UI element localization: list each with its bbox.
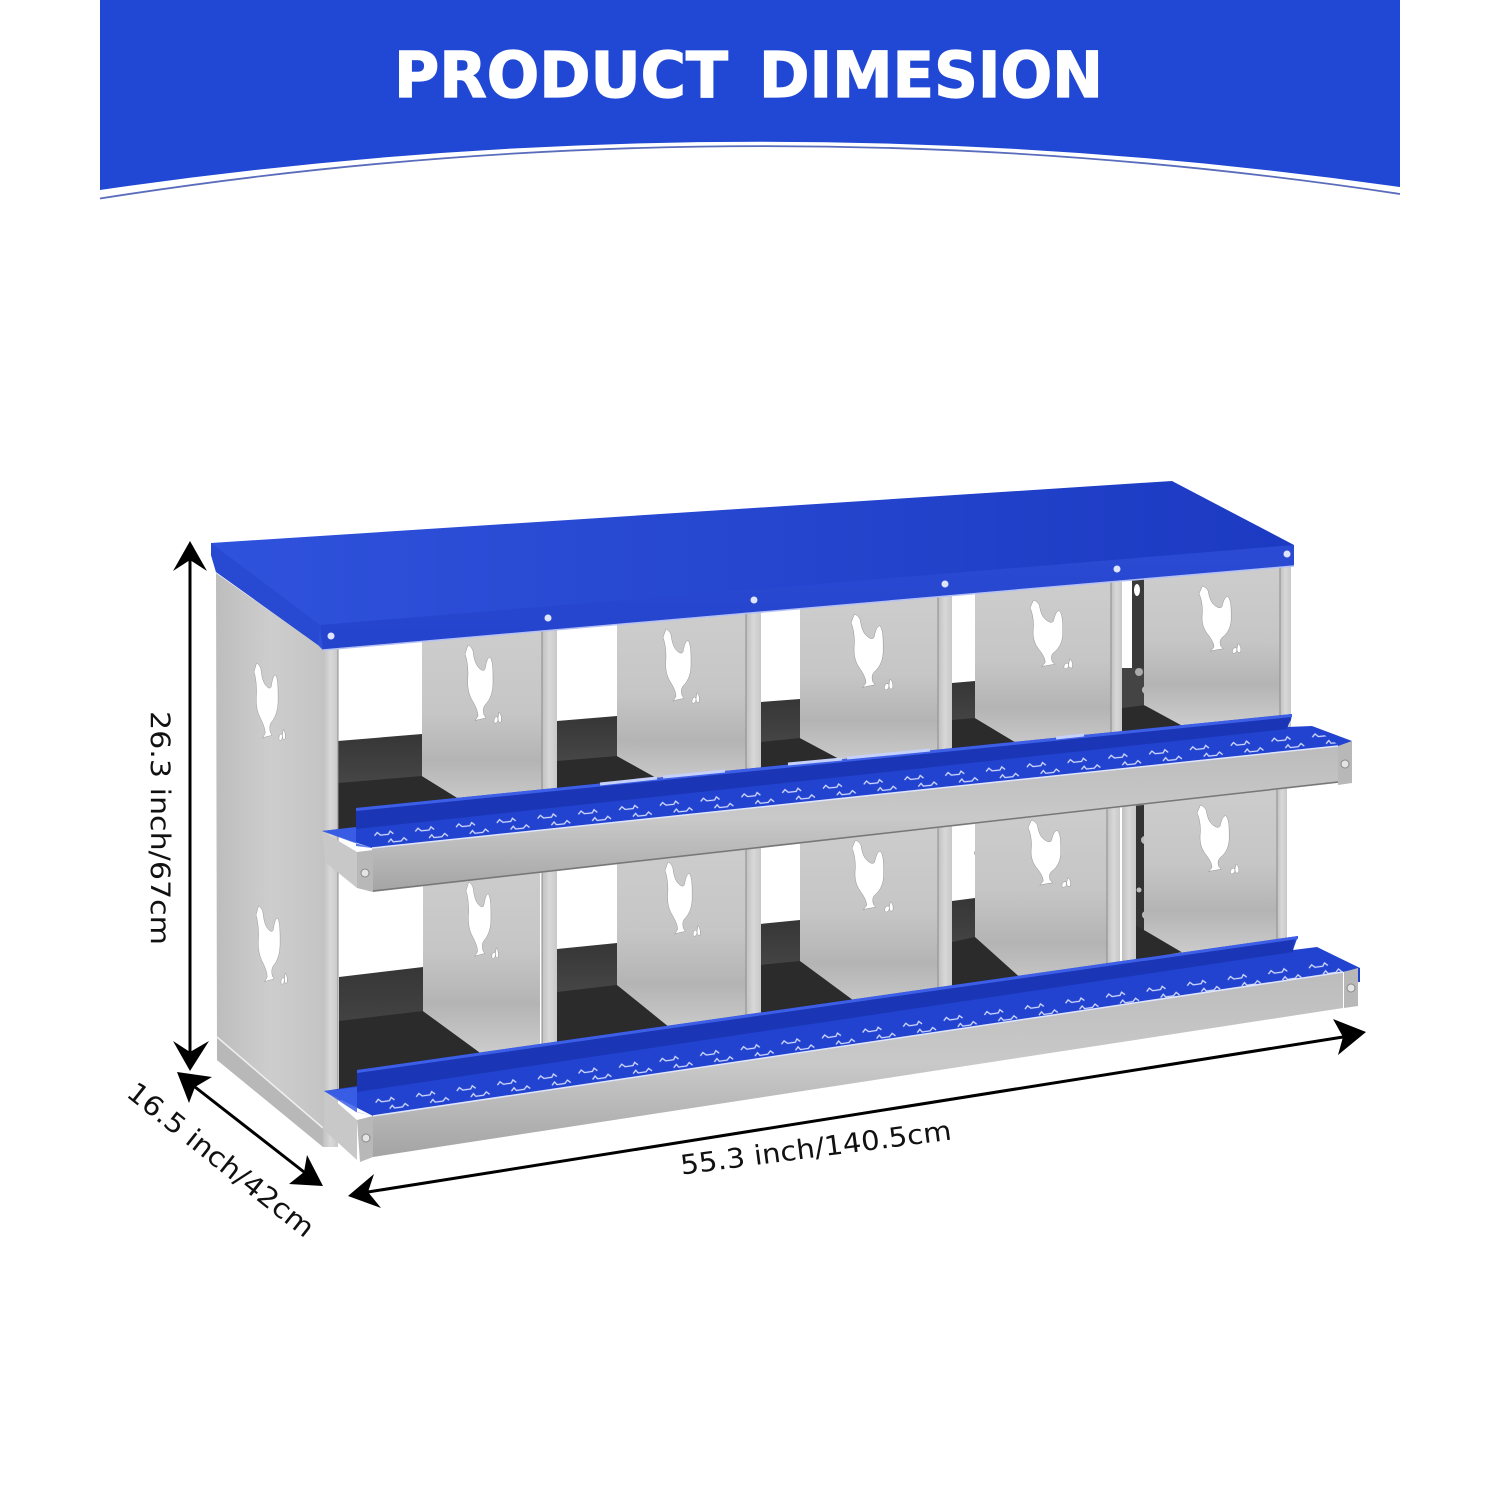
arrow: depth (177, 1072, 323, 1186)
title: PRODUCT (394, 39, 728, 112)
title: DIMESION (759, 39, 1103, 112)
product: nesting box (211, 481, 1360, 1162)
upper panel chicken cutouts (465, 586, 1241, 723)
upper divider panels (422, 567, 1280, 812)
title (394, 39, 1103, 112)
lower panel chicken cutouts (466, 805, 1239, 959)
label: height: 26.3 inch/67cm (144, 711, 175, 945)
tray top highlights (600, 735, 1084, 784)
roof screws (328, 550, 1290, 640)
arrow: width (348, 1019, 1366, 1208)
lower tray (324, 936, 1360, 1162)
blue roof (211, 481, 1294, 650)
post edge lines (338, 567, 1280, 1100)
side panel (216, 573, 324, 1147)
upper row compartments (338, 578, 1190, 830)
arrow: height (173, 541, 209, 1071)
header banner (100, 0, 1400, 198)
front posts (323, 567, 1291, 1147)
label: width: 55.3 inch/140.5cm (679, 1116, 953, 1182)
lower row compartments (339, 800, 1195, 1100)
label: depth: 16.5 inch/42cm (121, 1077, 320, 1244)
lower divider panels (423, 785, 1277, 1060)
upper tray (322, 714, 1352, 892)
